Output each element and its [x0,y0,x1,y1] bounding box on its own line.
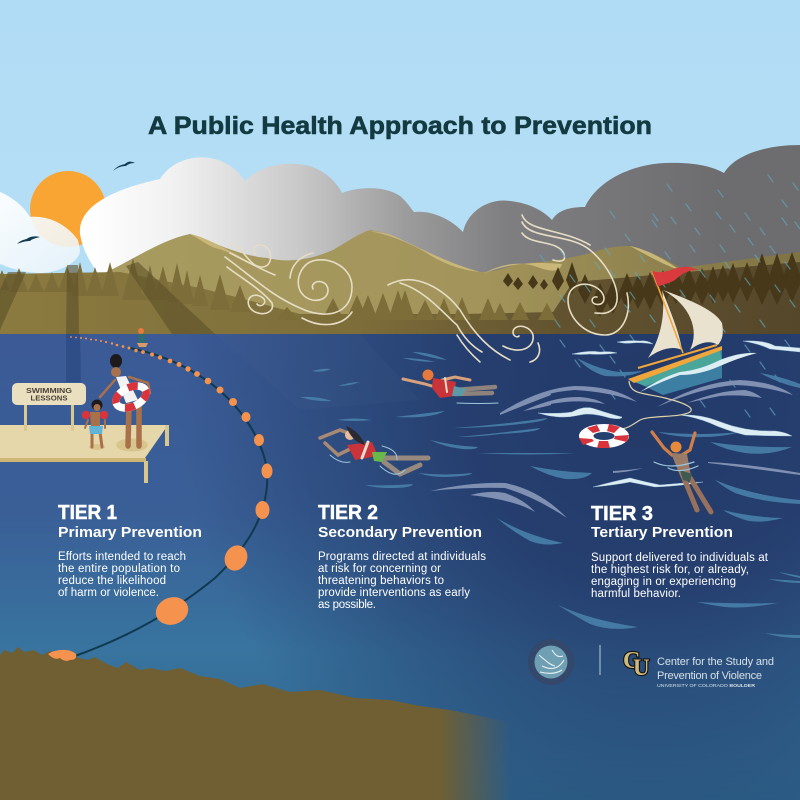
text block: tier 2: as possible. [318,599,376,611]
forest: ground band [0,262,800,334]
text block: tier 2 [318,502,486,611]
sign: swimming lessons: SWIMMING [26,386,72,395]
light rays in water [66,334,420,410]
sign: swimming lessons [12,383,86,431]
logo text [657,656,774,688]
swimmer: tier 2 dark hair [320,426,428,474]
sail left [648,290,682,358]
text block: tier 1: TIER 1 [58,502,117,524]
text block: tier 3: TIER 3 [591,503,653,525]
child with arm floats [82,400,108,450]
logo: CU interlock: C [623,648,640,674]
waves: white caps [538,341,800,487]
text block: tier 3 [591,503,769,600]
text block: tier 2: provide interventions as early [318,587,470,599]
boat wave [640,353,757,392]
logo text: UNIVERSITY OF COLORADO BOULDER [657,683,756,688]
icon: sun [30,171,106,247]
cloud: left white [0,192,80,273]
forest: dark right trees [503,252,800,317]
water [0,334,800,800]
text block: tier 1: Efforts intended to reach [58,551,186,563]
text block: tier 1: of harm or violence. [58,587,159,599]
deck rail [638,345,717,368]
text block: tier 1: Primary Prevention [58,525,202,541]
trees: left and middle spires [0,258,556,320]
icon: bird lower [17,236,40,244]
swimmer: tier 3 distressed [652,432,711,512]
text block: tier 2: Secondary Prevention [318,525,482,541]
text block: tier 1 [58,502,202,599]
text block: tier 2: Programs directed at individuals [318,551,486,563]
water shading towards storm [0,334,800,800]
logo text: Prevention of Violence [657,670,762,682]
text block: tier 2: at risk for concerning or [318,563,441,575]
dock [0,425,169,483]
icon: life ring [579,424,629,448]
logo divider [599,645,601,675]
title: A Public Health Approach to Prevention [148,112,652,140]
text block: tier 3: harmful behavior. [591,588,681,600]
woman with life ring [100,354,150,452]
sign: swimming lessons: LESSONS [30,394,68,402]
icon: bird upper [113,162,135,171]
rain [540,175,800,417]
floating buoys [70,336,272,629]
flag [652,267,698,287]
logo text: Center for the Study and [657,656,774,668]
wind swirls [225,215,628,362]
sailboat [628,267,757,395]
text block: tier 3: Tertiary Prevention [591,525,733,541]
waves: lavender crests [430,380,800,518]
text block: tier 1: reduce the likelihood [58,575,166,587]
sail right [663,290,723,350]
mast [652,271,683,353]
logo: CU interlock [623,648,650,680]
logo: dove seal [528,639,574,685]
buoy rope line [75,348,267,656]
text block: tier 3: Support delivered to individuals at [591,552,769,564]
rope [622,381,691,429]
mountains [100,230,800,334]
distant swimmer in small boat [137,328,148,347]
cloud: long bank fading from white to storm grey [80,145,800,300]
text block: tier 3: the highest risk for, or already, [591,564,749,576]
sky [0,0,800,340]
swimmer: tier 2 orange hair [403,370,498,404]
icon: shore buoy half hidden [48,650,76,661]
hull [628,348,722,395]
text block: tier 3: engaging in or experiencing [591,576,736,588]
text block: tier 2: TIER 2 [318,502,378,524]
text block: tier 1: the entire population to [58,563,180,575]
mountain ridge highlights [190,231,680,274]
waves: blue swells [300,352,800,638]
shoreline grass [0,647,510,800]
text block: tier 2: threatening behaviors to [318,575,444,587]
logo: CU interlock: U [633,655,650,680]
light rays over land [0,262,215,334]
